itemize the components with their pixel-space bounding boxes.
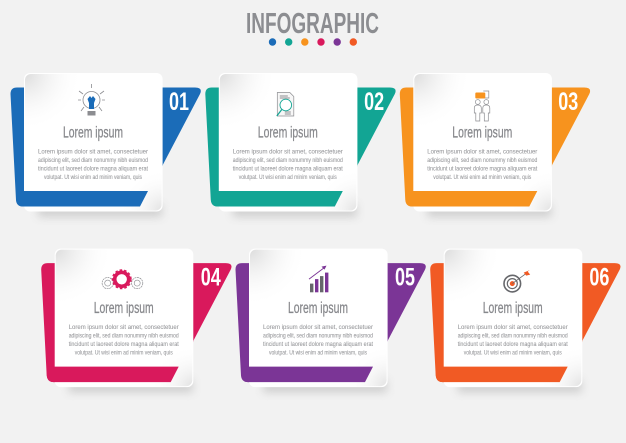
bottom band 02 [211, 191, 343, 206]
body text 06: tincidunt ut laoreet dolore magna aliquam erat [458, 341, 568, 348]
title: INFOGRAPHIC [246, 8, 379, 40]
body text 06: volutpat. Ut wisi enim ad minim veniam, quis [464, 349, 562, 356]
body text 01: Lorem ipsum dolor sit amet, consectetuer [38, 148, 149, 155]
body text 04: volutpat. Ut wisi enim ad minim veniam, quis [75, 349, 173, 356]
body text 05: tincidunt ut laoreet dolore magna aliquam erat [263, 341, 373, 348]
body text 01: adipiscing elit, sed diam nonummy nibh euismod [38, 157, 148, 164]
body text 05: adipiscing elit, sed diam nonummy nibh euismod [263, 332, 373, 339]
number 03: 03 [558, 88, 578, 116]
body text 04: Lorem ipsum dolor sit amet, consectetuer [69, 324, 179, 331]
body text 03: volutpat. Ut wisi enim ad minim veniam, quis [433, 174, 532, 181]
panel: step 06 [430, 249, 621, 393]
heading 02: Lorem ipsum [258, 124, 318, 142]
white card 05 [249, 249, 388, 387]
body text 02: tincidunt ut laoreet dolore magna aliquam erat [233, 165, 343, 172]
body text 06: adipiscing elit, sed diam nonummy nibh euismod [458, 332, 568, 339]
white card 03 [413, 73, 552, 212]
body text 01: volutpat. Ut wisi enim ad minim veniam, quis [44, 174, 143, 181]
bottom band 04 [47, 367, 179, 382]
body text 03 [427, 148, 538, 181]
coloured backing 03 [400, 88, 590, 206]
coloured backing 01 [10, 88, 201, 206]
body text 01 [38, 148, 149, 181]
body text 04 [69, 324, 179, 356]
panel: step 05 [236, 249, 426, 393]
number 02: 02 [364, 88, 384, 116]
bottom band 06 [436, 367, 568, 382]
icon: two people talking [474, 91, 490, 121]
white card 06 [444, 249, 582, 387]
panel: step 02 [205, 73, 396, 217]
body text 03: adipiscing elit, sed diam nonummy nibh euismod [427, 157, 538, 164]
heading 01: Lorem ipsum [63, 124, 123, 142]
number 05: 05 [395, 264, 415, 292]
body text 04: adipiscing elit, sed diam nonummy nibh euismod [69, 332, 179, 339]
icon: document with magnifier [277, 92, 294, 116]
bottom band 05 [241, 367, 373, 382]
body text 05: volutpat. Ut wisi enim ad minim veniam, quis [269, 349, 368, 356]
number 06: 06 [589, 264, 609, 292]
white card 01 [24, 73, 163, 212]
panel: step 03 [400, 73, 590, 217]
icon: light bulb [78, 84, 105, 116]
body text 06: Lorem ipsum dolor sit amet, consectetuer [458, 324, 568, 331]
body text 05: Lorem ipsum dolor sit amet, consectetuer [263, 324, 374, 331]
heading 05: Lorem ipsum [288, 300, 348, 317]
body text 02: adipiscing elit, sed diam nonummy nibh euismod [233, 157, 343, 164]
body text 02 [233, 148, 344, 181]
bottom band 01 [16, 191, 148, 206]
body text 03: tincidunt ut laoreet dolore magna aliquam erat [427, 165, 537, 172]
white card 02 [219, 73, 357, 212]
body text 02: volutpat. Ut wisi enim ad minim veniam, quis [239, 174, 337, 181]
coloured backing 04 [41, 263, 232, 382]
heading 04: Lorem ipsum [94, 300, 154, 317]
panel: step 04 [41, 249, 232, 393]
body text 02: Lorem ipsum dolor sit amet, consectetuer [233, 148, 344, 155]
coloured backing 02 [205, 88, 396, 206]
body text 05 [263, 324, 374, 356]
coloured backing 06 [430, 263, 621, 382]
body text 06 [458, 324, 568, 356]
colour dots [269, 38, 357, 46]
icon: gears [102, 270, 143, 289]
body text 04: tincidunt ut laoreet dolore magna aliquam erat [69, 341, 179, 348]
icon: target with arrow [504, 270, 530, 292]
body text 03: Lorem ipsum dolor sit amet, consectetuer [427, 148, 538, 155]
number 01: 01 [169, 88, 189, 116]
bottom band 03 [405, 191, 537, 206]
white card 04 [55, 249, 193, 387]
heading 03: Lorem ipsum [452, 124, 512, 142]
icon: rising bar chart [309, 266, 328, 292]
panel: step 01 [10, 73, 201, 217]
number 04: 04 [201, 264, 221, 292]
heading 06: Lorem ipsum [483, 300, 543, 317]
coloured backing 05 [236, 263, 426, 382]
body text 01: tincidunt ut laoreet dolore magna aliquam erat [38, 165, 148, 172]
